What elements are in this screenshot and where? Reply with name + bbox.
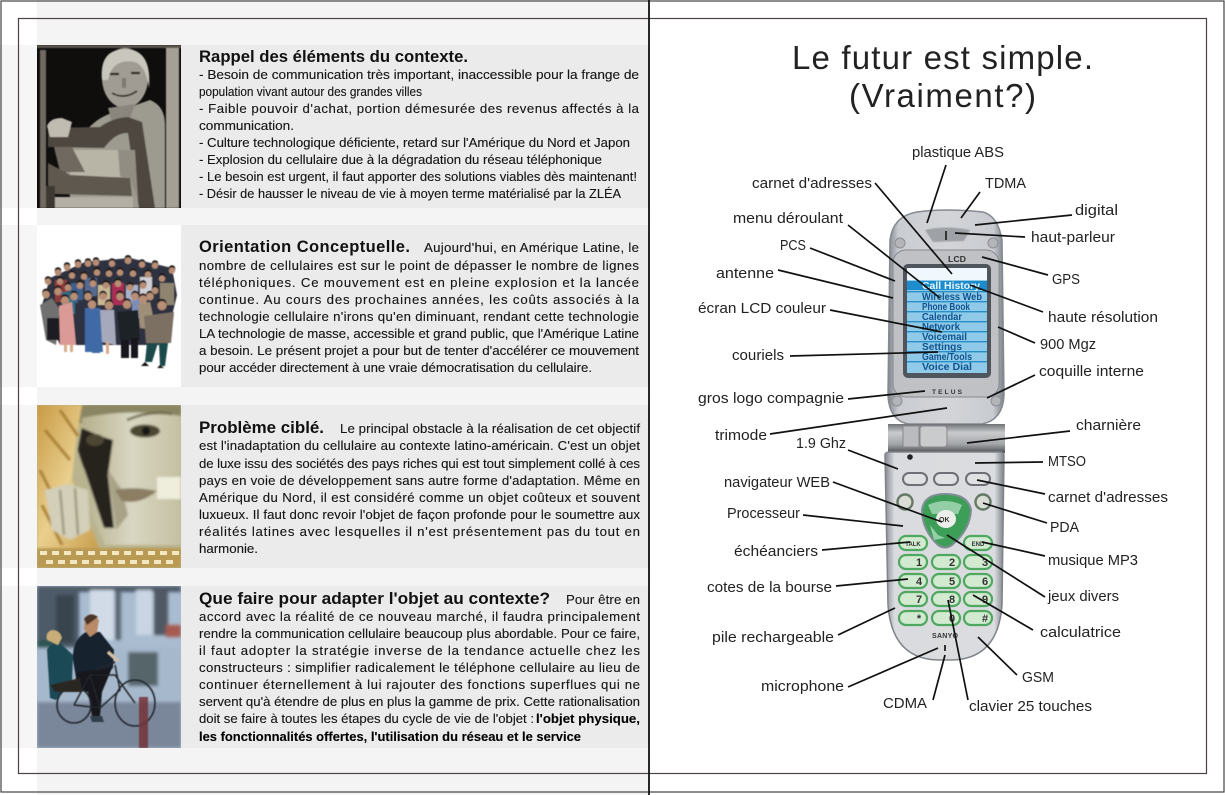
- callout: trimode: [715, 408, 947, 444]
- callout: GSM: [978, 637, 1054, 686]
- callout: GSM: GSM: [1022, 670, 1054, 686]
- callout: GPS: [982, 257, 1080, 288]
- text block: luxueux. Il faut donc revoir l'objet de façon profonde pour le soumettre aux: [199, 507, 640, 522]
- text block: accord avec la réalité de ce nouveau marché, il faudra principalement: [199, 609, 640, 624]
- phone lower body with keypad: END: [972, 542, 985, 548]
- heading: Rappel des éléments du contexte.: [199, 48, 468, 66]
- callout: Processeur: Processeur: [727, 506, 800, 522]
- phone lower body with keypad: 4: [916, 576, 923, 588]
- callout: MTSO: [975, 454, 1086, 470]
- photo: couple on a bicycle: [37, 586, 181, 748]
- callout: jeux divers: [947, 535, 1119, 605]
- callout: calculatrice: calculatrice: [1040, 625, 1121, 641]
- callout: antenne: antenne: [716, 266, 774, 282]
- callout: plastique ABS: plastique ABS: [912, 145, 1004, 161]
- callout: carnet d'adresses right: [977, 480, 1168, 506]
- phone screen: Voicemail: [922, 332, 967, 343]
- text block: Pour être en: [566, 592, 640, 607]
- phone screen: [907, 268, 987, 373]
- text block: il faut adopter la stratégie inverse de la tendance actuelle chez les: [199, 643, 640, 658]
- text block: harmonie.: [199, 541, 258, 556]
- phone screen: Network: [922, 322, 960, 333]
- callout: cotes de la bourse: [707, 579, 908, 596]
- text block: continuer éternellement à lui rajouter des fonctions superflues qui ne: [199, 677, 640, 692]
- text block: continue. Au cours des prochaines années, les coûts associés à la: [199, 292, 640, 307]
- phone lower body with keypad: *: [917, 613, 922, 625]
- callout: 1.9 Ghz: 1.9 Ghz: [796, 436, 846, 452]
- text block: a besoin. Le présent projet a pour but de tenter d'accélérer ce mouvement: [199, 343, 639, 358]
- callout: microphone: [761, 648, 938, 695]
- callout: 1.9 Ghz: [796, 436, 898, 469]
- callout: haute résolution: [970, 285, 1158, 326]
- callout: jeux divers: jeux divers: [1047, 589, 1119, 605]
- heading: Problème ciblé.: [199, 419, 324, 437]
- text block: rendre la communication cellulaire beaucoup plus abordable. Pour ce faire,: [199, 626, 640, 641]
- text block: communication.: [199, 118, 294, 133]
- text block: [199, 67, 640, 201]
- photo: crowd of people on phones: [37, 225, 181, 387]
- text block: [199, 421, 640, 556]
- phone lower body with keypad: 9: [982, 594, 988, 606]
- panel: rappel du contexte: [37, 45, 649, 208]
- phone lower body with keypad: 7: [916, 594, 922, 606]
- callout: pile rechargeable: pile rechargeable: [712, 630, 834, 646]
- callout: charnière: charnière: [1076, 418, 1141, 434]
- text block: nombre de cellulaires est sur le point de dépasser le nombre de lignes: [199, 258, 639, 273]
- callout: écran LCD couleur: [698, 301, 942, 332]
- phone lower body with keypad: 5: [949, 576, 955, 588]
- callout: TDMA: TDMA: [985, 176, 1026, 192]
- callout: trimode: trimode: [715, 428, 767, 444]
- callout: gros logo compagnie: [698, 391, 925, 407]
- photo: elderly woman on a chair: [37, 45, 181, 208]
- text block: - Désir de hausser le niveau de vie à moyen terme matérialisé par la ZLÉA: [199, 186, 621, 201]
- callout: MTSO: MTSO: [1048, 454, 1086, 470]
- phone lower body with keypad: 8: [949, 594, 955, 606]
- phone illustration: [885, 210, 1005, 660]
- phone screen: Settings: [922, 342, 962, 353]
- callout: échéanciers: [734, 542, 910, 560]
- callout: coquille interne: [987, 364, 1144, 398]
- callout: navigateur WEB: [724, 475, 942, 522]
- phone lower body with keypad: 1: [916, 557, 922, 569]
- callout: couriels: couriels: [732, 348, 784, 364]
- callout: haute résolution: haute résolution: [1048, 310, 1158, 326]
- text block: l'objet physique,: [536, 711, 640, 726]
- callout: digital: digital: [1075, 203, 1118, 219]
- text block: pays en voie de développement sans autre forme d'adaptation. Même en: [199, 473, 640, 488]
- callout: charnière: [967, 418, 1141, 443]
- text block: [199, 592, 640, 744]
- callout: couriels: [732, 348, 938, 364]
- phone upper flap: TELUS: [932, 389, 963, 396]
- title: (Vraiment?): [849, 77, 1036, 114]
- callout: carnet d'adresses: carnet d'adresses: [752, 176, 872, 192]
- phone screen: Voice Dial: [922, 362, 972, 373]
- text block: Le principal obstacle à la réalisation de cet objectif: [340, 421, 640, 436]
- callout: digital: [975, 203, 1118, 225]
- callout: microphone: microphone: [761, 679, 844, 695]
- text block: - Besoin de communication très important, inaccessible pour la frange de: [199, 67, 639, 82]
- callout: PDA: [983, 503, 1079, 536]
- title: [792, 39, 1093, 114]
- phone lower body with keypad: 6: [982, 576, 988, 588]
- text block: est l'inadaptation du cellulaire au contexte latino-américain. C'est un objet: [199, 438, 640, 453]
- panel: orientation conceptuelle: [37, 225, 649, 387]
- text block: Amérique du Nord, il est considéré comme un objet coûteux et souvent: [199, 490, 640, 505]
- phone screen: Phone Book: [922, 302, 970, 313]
- text block: - Explosion du cellulaire due à la dégradation du réseau téléphonique: [199, 152, 602, 167]
- callout: cotes de la bourse: cotes de la bourse: [707, 580, 832, 596]
- callout: plastique ABS: [912, 145, 1004, 223]
- phone screen: Wireless Web: [922, 292, 982, 303]
- callout: 900 Mgz: [998, 327, 1096, 353]
- text block: les fonctionnalités offertes, l'utilisation du réseau et le service: [199, 729, 581, 744]
- text block: population vivant autour des grandes villes: [199, 84, 422, 99]
- photo: woman on phone with banknotes: [37, 405, 181, 568]
- callout: PCS: PCS: [780, 238, 806, 254]
- phone lower body with keypad: 2: [949, 557, 955, 569]
- phone lower body with keypad: [885, 452, 1004, 660]
- text block: - Le besoin est urgent, il faut apporter des solutions viables dès maintenant!: [199, 169, 637, 184]
- text block: de luxe issu des sociétés des pays riches qui est tout simplement collé à ces: [199, 456, 640, 471]
- phone screen: Game/Tools: [922, 352, 972, 363]
- panel: probleme cible: [37, 405, 649, 568]
- callout: PDA: PDA: [1050, 520, 1079, 536]
- text block: - Faible pouvoir d'achat, portion démesurée des revenus affectés à la: [199, 101, 640, 116]
- callout: TDMA: [961, 176, 1026, 218]
- callout: carnet d'adresses: [752, 176, 952, 274]
- text block: téléphoniques. Ce mouvement est en pleine explosion et la lancée: [199, 275, 639, 290]
- phone hinge: [888, 424, 1005, 453]
- callout: musique MP3: [982, 542, 1138, 569]
- phone screen: Call History: [922, 281, 980, 292]
- phone lower body with keypad: #: [982, 613, 988, 625]
- text block: pour accéder directement à une vraie démocratisation du cellulaire.: [199, 360, 592, 375]
- phone upper flap: [888, 210, 1004, 424]
- panel: que faire: [37, 586, 649, 748]
- callout: CDMA: CDMA: [883, 696, 927, 712]
- phone upper flap: LCD: [948, 255, 966, 264]
- callout: menu déroulant: menu déroulant: [733, 211, 843, 227]
- callout: échéanciers: échéanciers: [734, 544, 818, 560]
- phone lower body with keypad: TALK: [905, 542, 921, 548]
- text block: [199, 240, 640, 375]
- callout: PCS: [780, 238, 895, 281]
- phone lower body with keypad: 3: [982, 557, 988, 569]
- callout: menu déroulant: [733, 211, 940, 298]
- text block: technologie cellulaire n'irons qu'en diminuant, rendant cette technologie: [199, 309, 639, 324]
- text block: LA technologie de masse, accessible et grand public, que l'Amérique Latine: [199, 326, 639, 341]
- callout: haut-parleur: [955, 230, 1115, 246]
- text block: constructeurs : simplifier radicalement le téléphone cellulaire au lieu de: [199, 660, 640, 675]
- text block: Aujourd'hui, en Amérique Latine, le: [424, 240, 639, 255]
- phone lower body with keypad: SANYO: [932, 633, 959, 640]
- text block: doit se faire à toutes les étapes du cycle de vie de l'objet :: [199, 711, 534, 726]
- text block: - Culture technologique déficiente, retard sur l'Amérique du Nord et Japon: [199, 135, 630, 150]
- callout: haut-parleur: haut-parleur: [1031, 230, 1115, 246]
- callout: pile rechargeable: [712, 608, 895, 646]
- left page background: [0, 0, 649, 795]
- callout: antenne: [716, 266, 893, 298]
- text block: servent qu'à étendre de plus en plus la gamme de prix. Cette rationalisation: [199, 694, 640, 709]
- callout: gros logo compagnie: gros logo compagnie: [698, 391, 844, 407]
- phone lower body with keypad: 0: [949, 613, 955, 625]
- callout: coquille interne: coquille interne: [1039, 364, 1144, 380]
- callout: calculatrice: [973, 595, 1121, 641]
- callout: 900 Mgz: 900 Mgz: [1040, 337, 1096, 353]
- callout: navigateur WEB: navigateur WEB: [724, 475, 830, 491]
- callout: écran LCD couleur: écran LCD couleur: [698, 301, 826, 317]
- phone lower body with keypad: OK: [939, 517, 950, 524]
- title: Le futur est simple.: [792, 39, 1093, 76]
- callout: clavier 25 touches: clavier 25 touches: [969, 699, 1092, 715]
- heading: Orientation Conceptuelle.: [199, 238, 410, 256]
- callout: clavier 25 touches: [948, 600, 1092, 715]
- heading: Que faire pour adapter l'objet au contexte?: [199, 590, 550, 608]
- callout: CDMA: [883, 655, 945, 712]
- callout: Processeur: [727, 506, 903, 526]
- callout: musique MP3: musique MP3: [1048, 553, 1138, 569]
- text block: réalités latines avec lesquelles il n'est présentement pas du tout en: [199, 524, 640, 539]
- callout: GPS: GPS: [1052, 272, 1080, 288]
- callout: carnet d'adresses right: carnet d'adresses: [1048, 490, 1168, 506]
- phone screen: Calendar: [922, 312, 962, 323]
